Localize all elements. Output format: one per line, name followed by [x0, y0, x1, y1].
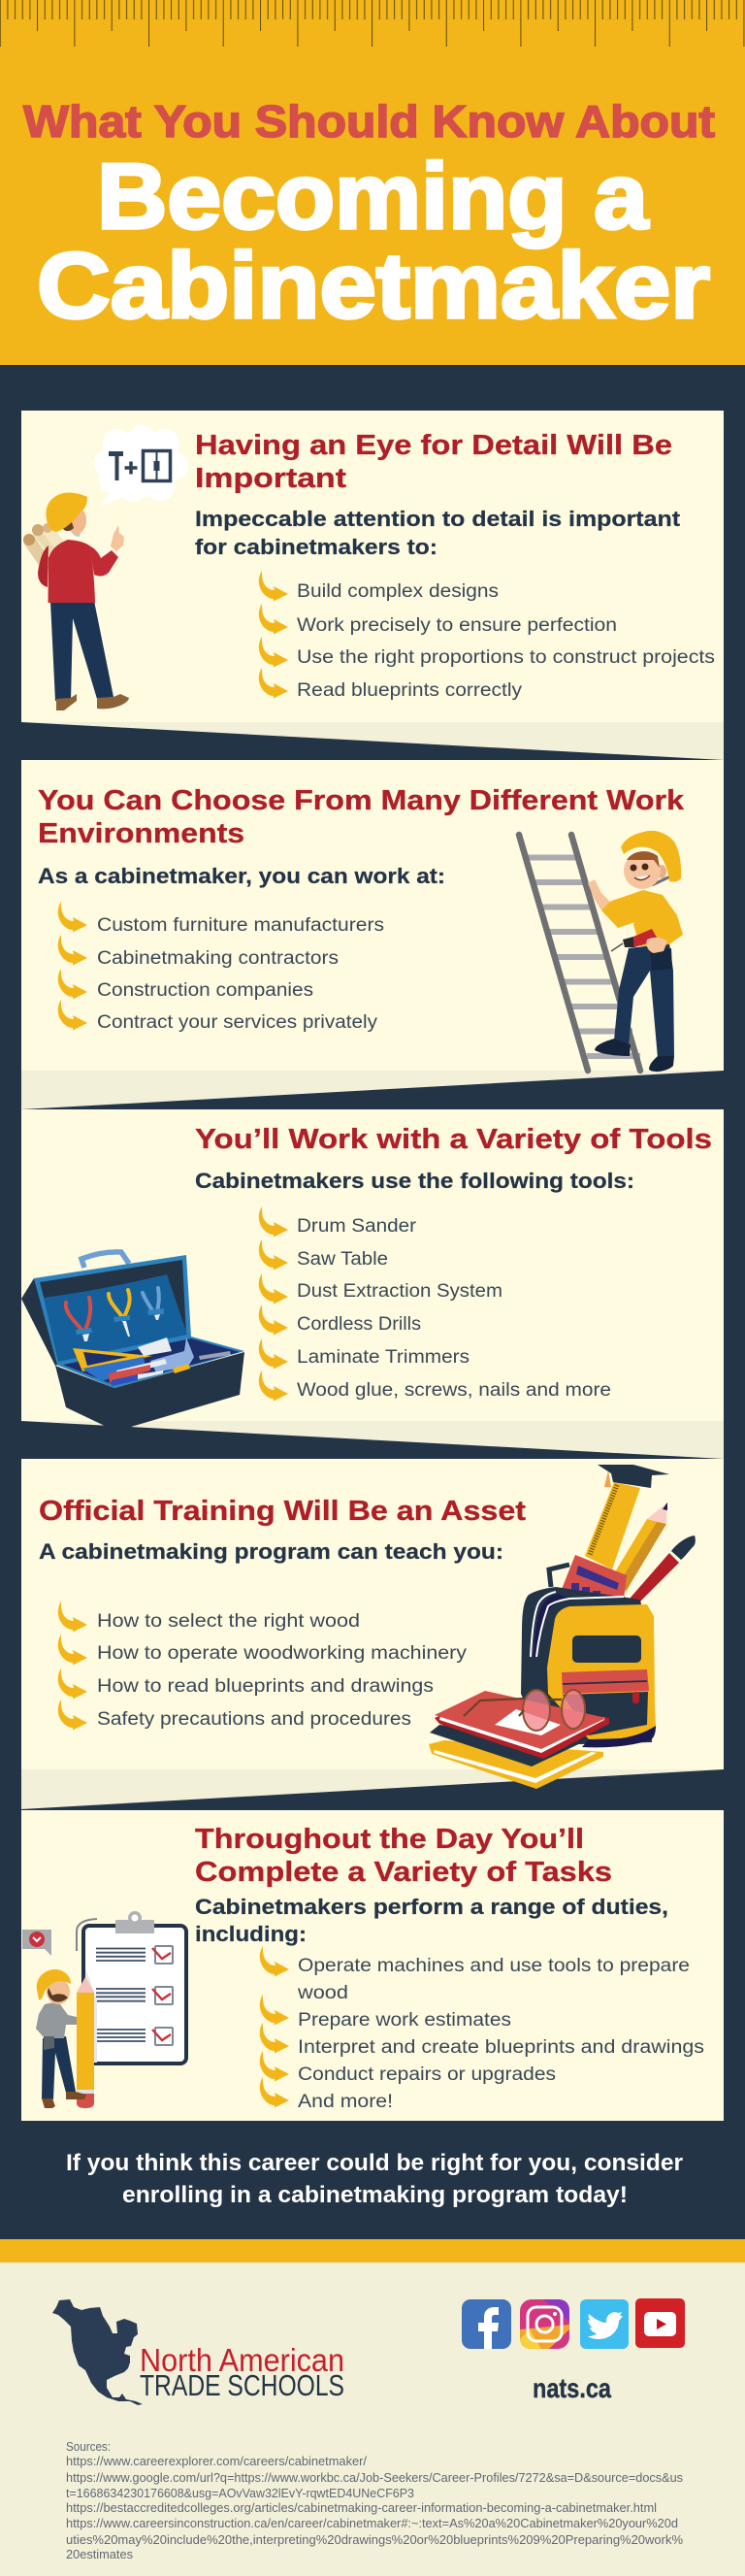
intro text: Cabinetmakers perform a range of duties, [195, 1895, 668, 1919]
bulleted list: Saw Table [297, 1249, 388, 1270]
panel: work environments [21, 760, 724, 1109]
website: nats.ca [533, 2373, 611, 2403]
icon: youtube [635, 2298, 685, 2348]
sources: uties%20may%20include%20the,interpreting%20drawings%20or%20blueprints%209%20Preparing%20work% [66, 2532, 683, 2547]
bulleted list: Prepare work estimates [298, 2010, 511, 2031]
heading: Environments [38, 818, 244, 849]
title: main line two: Cabinetmaker [37, 234, 710, 338]
bulleted list: Cabinetmaking contractors [97, 948, 339, 969]
illustration: toolbox [21, 1252, 244, 1427]
panel: variety of tools [21, 1109, 724, 1459]
bulleted list [260, 1946, 704, 2112]
pencil [77, 1968, 97, 2108]
logo wordmark: North American [140, 2342, 344, 2378]
heading: Official Training Will Be an Asset [39, 1496, 527, 1527]
heading: You Can Choose From Many Different Work [38, 785, 684, 816]
calculator [555, 1555, 627, 1606]
sources: t=1668634230176608&usg=AOvVaw32lEvY-rqwtED4UNeCF6P3 [66, 2486, 414, 2500]
heading: Having an Eye for Detail Will Be [195, 430, 672, 461]
bulleted list: Drum Sander [297, 1216, 417, 1237]
sources: 20estimates [66, 2547, 133, 2561]
bulleted list: Custom furniture manufacturers [97, 915, 384, 936]
bulleted list: Wood glue, screws, nails and more [297, 1380, 611, 1401]
heading: You’ll Work with a Variety of Tools [195, 1124, 712, 1155]
illustration: worker on ladder [519, 831, 683, 1072]
icon: instagram [520, 2299, 569, 2349]
social icons [462, 2298, 685, 2349]
bulleted list: Laminate Trimmers [297, 1347, 470, 1368]
illustration: worker with clipboard [22, 1911, 186, 2108]
bulleted list [58, 902, 384, 1033]
intro text: As a cabinetmaker, you can work at: [38, 864, 445, 888]
clipboard [77, 1911, 186, 2064]
sources: https://www.careerexplorer.com/careers/cabinetmaker/ [66, 2454, 367, 2468]
paintbrush [630, 1536, 696, 1602]
bulleted list: Read blueprints correctly [297, 680, 523, 701]
header banner [0, 0, 745, 365]
bulleted list: How to operate woodworking machinery [97, 1643, 468, 1664]
backpack [521, 1565, 656, 1747]
icon: facebook [462, 2299, 511, 2349]
bulleted list: Interpret and create blueprints and drawings [298, 2037, 704, 2058]
bulleted list: Conduct repairs or upgrades [298, 2064, 556, 2085]
bulleted list: Safety precautions and procedures [97, 1709, 411, 1730]
heading [195, 430, 672, 494]
icon: speech bubble [22, 1930, 51, 1956]
logo: North American Trade Schools [52, 2299, 344, 2405]
ruler ticks [0, 0, 745, 47]
bulleted list: How to select the right wood [97, 1611, 360, 1632]
sources: Sources: [66, 2439, 111, 2454]
bulleted list: Build complex designs [297, 581, 499, 602]
bulleted list [259, 571, 715, 701]
bulleted list: How to read blueprints and drawings [97, 1676, 434, 1697]
heading [195, 1824, 612, 1888]
bulleted list: Cordless Drills [297, 1314, 421, 1335]
heading: Throughout the Day You’ll [195, 1824, 584, 1855]
heading: Important [195, 463, 347, 494]
icon: North America map [52, 2299, 143, 2405]
intro text [195, 1895, 668, 1946]
intro text: for cabinetmakers to: [195, 535, 437, 559]
logo wordmark: TRADE SCHOOLS [140, 2368, 344, 2402]
stack of books [429, 1691, 609, 1789]
bulleted list: Contract your services privately [97, 1012, 378, 1033]
ruler with graduation cap [585, 1465, 669, 1569]
glasses [464, 1690, 585, 1731]
logo wordmark [140, 2342, 344, 2402]
sources: https://www.google.com/url?q=https://www.workbc.ca/Job-Seekers/Career-Profiles/7272&sa=D&source=docs&us [66, 2470, 683, 2485]
worker [36, 1969, 86, 2108]
bulleted list: And more! [298, 2092, 393, 2112]
bulleted list: Construction companies [97, 980, 313, 1001]
call to action: If you think this career could be right for you, consider [66, 2150, 683, 2176]
panel: eye for detail [21, 411, 724, 760]
intro text: Impeccable attention to detail is important [195, 507, 681, 531]
bulleted list: Use the right proportions to construct projects [297, 647, 715, 668]
sources [66, 2439, 683, 2561]
bulleted list: wood [297, 1983, 348, 2003]
bulleted list [259, 1206, 611, 1402]
panel: official training [21, 1459, 724, 1809]
illustration: backpack and books [429, 1465, 696, 1789]
intro text: including: [195, 1922, 307, 1946]
call to action: enrolling in a cabinetmaking program today! [122, 2182, 628, 2208]
bulleted list [58, 1602, 468, 1730]
panel: daily tasks [21, 1810, 724, 2121]
yellow divider band [0, 2239, 745, 2262]
footer [0, 2262, 745, 2576]
bulleted list: Work precisely to ensure perfection [297, 615, 617, 636]
icon: thought bubble with tools [94, 425, 188, 507]
sources: https://www.careersinconstruction.ca/en/career/cabinetmaker#:~:text=As%20a%20Cabinetmaker%20your%20d [66, 2516, 678, 2530]
intro text [195, 507, 681, 559]
bulleted list: Operate machines and use tools to prepare [298, 1956, 690, 1976]
call to action [66, 2150, 683, 2208]
sources: https://bestaccreditedcolleges.org/articles/cabinetmaking-career-information-becoming-a-cabinetmaker.html [66, 2500, 657, 2515]
bulleted list: Dust Extraction System [297, 1281, 502, 1302]
ladder [519, 835, 640, 1071]
pencil [616, 1503, 667, 1592]
intro text: Cabinetmakers use the following tools: [195, 1169, 634, 1193]
title: kicker line: What You Should Know About [23, 96, 715, 147]
intro text: A cabinetmaking program can teach you: [39, 1539, 503, 1564]
illustration: worker viewing plans [23, 492, 129, 710]
icon: twitter [580, 2299, 629, 2349]
title: main line one: Becoming a [97, 145, 649, 248]
heading: Complete a Variety of Tasks [195, 1857, 612, 1888]
heading [38, 785, 684, 849]
